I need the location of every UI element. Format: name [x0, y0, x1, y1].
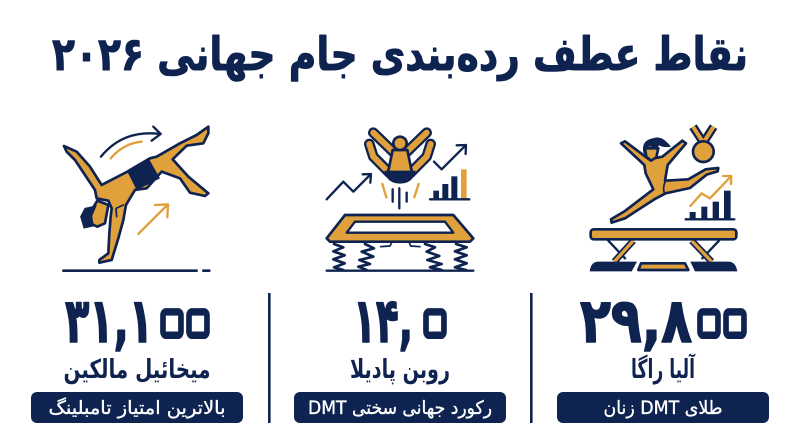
pill: DMT difficulty record: رکورد جهانی سختی DMT — [308, 398, 492, 419]
score: 31,100: ۰ — [177, 265, 219, 372]
score: 14,0 — [353, 265, 456, 372]
pill: highest tumbling score — [31, 392, 243, 423]
chart: rising bars — [430, 169, 469, 199]
icon: left trend arrow — [327, 174, 371, 199]
athlete name: روبن پادیلا — [350, 355, 450, 385]
icon: trampoline jumper — [327, 133, 473, 271]
score: 29,800: ۲۹,۸ — [580, 284, 692, 357]
pill: women's DMT gold: طلای DMT زنان — [604, 398, 722, 419]
icon: right trend arrow — [434, 145, 466, 169]
score: 31,100 — [65, 265, 219, 372]
panel: Padilla — [294, 133, 506, 423]
pill: women's DMT gold — [557, 392, 769, 423]
score: 14,0: ۱۴, — [353, 284, 413, 357]
chart: bars with gold trend arrow — [686, 176, 734, 219]
panel: Malkin — [31, 127, 243, 423]
score: 29,800: ۰ — [714, 265, 756, 372]
icon: gymnast on beam — [590, 127, 737, 271]
score: 14,0: ۰ — [414, 265, 456, 372]
score: 31,100: ۰ — [151, 265, 193, 372]
pill: DMT difficulty record — [294, 392, 506, 423]
icon: rotation arrow — [101, 127, 161, 158]
athlete name: آلیا راگا — [631, 353, 696, 385]
score: 29,800 — [580, 265, 756, 372]
icon: upward arrow — [138, 204, 168, 234]
icon: gold medal — [693, 127, 714, 162]
score: 31,100: ۳۱,۱ — [65, 284, 153, 357]
pill: highest tumbling score: بالاترین امتیاز تامبلینگ — [48, 397, 226, 419]
athlete name: میخائیل مالکین — [64, 355, 210, 385]
panel: Raga — [557, 127, 769, 423]
score: 29,800: ۰ — [688, 265, 730, 372]
icon: tumbling gymnast — [63, 127, 209, 271]
